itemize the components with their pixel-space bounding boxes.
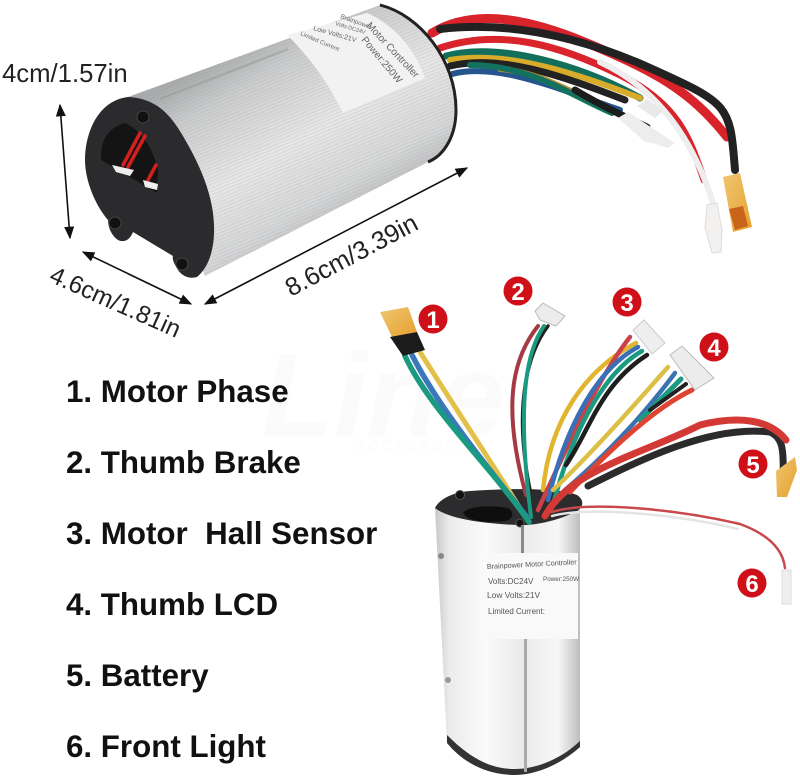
badge 1 [418, 304, 448, 334]
label: Limited Current: [299, 31, 341, 54]
badge 5 [738, 450, 768, 479]
parts list: 4. Thumb LCD [66, 587, 278, 622]
parts list: 6. Front Light [66, 729, 266, 764]
wires: thumb LCD [553, 367, 692, 492]
parts list [66, 374, 377, 764]
label: Brainpower [339, 13, 373, 31]
connector: front light [782, 570, 791, 604]
watermark: Line [262, 330, 505, 462]
top connectors [618, 99, 752, 253]
badge 2: 2 [511, 279, 525, 306]
label: Motor Controller [364, 21, 421, 81]
label: Volts:DC24V [334, 21, 366, 36]
label: Brainpower Motor Controller [487, 557, 577, 571]
wires: battery [545, 420, 786, 516]
badge 3: 3 [620, 290, 634, 317]
parts list: 5. Battery [66, 658, 209, 693]
badge 6 [738, 568, 766, 598]
badge 4 [700, 332, 728, 362]
wires: thumb brake [512, 326, 548, 517]
badge 5: 5 [746, 452, 760, 479]
top controller body [128, 5, 456, 276]
wires: motor hall sensor [538, 337, 647, 510]
label: Power:250W [543, 576, 579, 583]
badge 3 [612, 288, 642, 317]
dimension: length [205, 168, 467, 304]
connector: hall sensor [633, 320, 665, 354]
parts list: 3. Motor Hall Sensor [66, 516, 377, 551]
label: Volts:DC24V [488, 577, 534, 586]
badge 6: 6 [745, 571, 759, 598]
dimension: width: 4.6cm/1.81in [46, 262, 185, 344]
wires: motor phase [405, 352, 529, 522]
parts list: 2. Thumb Brake [66, 445, 301, 480]
dimension: length: 8.6cm/3.39in [281, 209, 423, 302]
icon: gold plug [723, 173, 752, 232]
connector: battery plug [776, 457, 797, 497]
top controller wires [432, 18, 735, 203]
wires: front light [552, 507, 785, 568]
controller end face [85, 97, 214, 278]
badge 1: 1 [426, 307, 440, 334]
label: Power:250W [359, 35, 404, 86]
connector: thumb LCD [670, 346, 714, 390]
label: Low Volts:21V [312, 25, 357, 44]
watermark: ACCESSORIES [355, 437, 490, 453]
label: Low Volts:21V [487, 590, 540, 600]
label [287, 13, 425, 113]
connector: motor phase plug [380, 307, 425, 356]
number badges [418, 276, 768, 598]
badge 2 [504, 276, 532, 306]
label: Limited Current: [488, 607, 545, 616]
dimension: height: 4cm/1.57in [2, 60, 128, 88]
parts list: 1. Motor Phase [66, 374, 289, 409]
connector: thumb brake [535, 303, 565, 326]
dimension: height [2, 60, 128, 238]
second controller body [435, 489, 582, 775]
label [478, 553, 579, 639]
badge 4: 4 [707, 335, 721, 362]
